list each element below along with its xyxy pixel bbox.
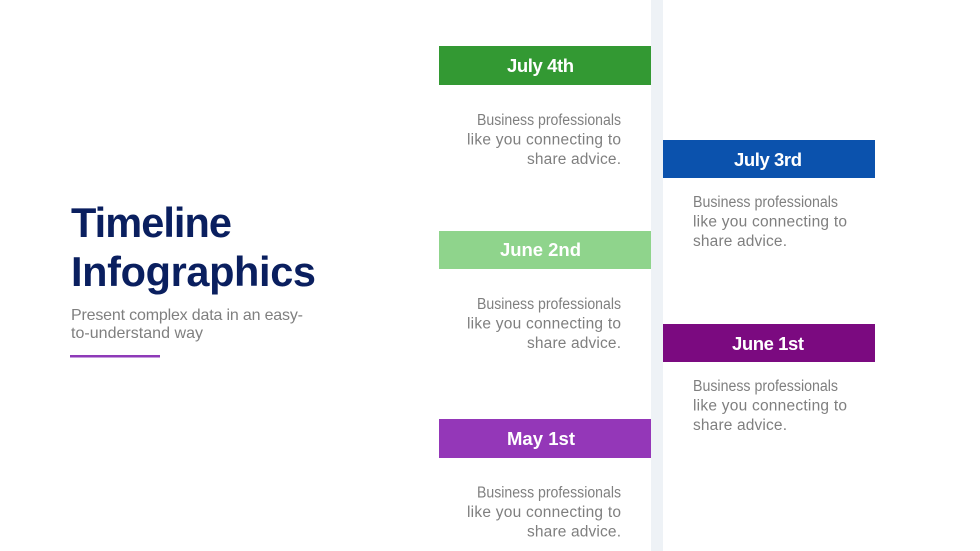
description: June 2nd: [467, 296, 621, 352]
header bar: June 1st: June 1st: [732, 333, 804, 354]
header bar: July 4th: July 4th: [507, 55, 574, 76]
subtitle: [71, 307, 303, 342]
description: May 1st: [467, 484, 621, 540]
description: July 3rd: like you connecting to: [693, 214, 847, 230]
milestone: May 1st: [439, 419, 651, 540]
description: June 1st: Business professionals: [693, 378, 838, 395]
description: July 4th: share advice.: [527, 151, 621, 168]
header bar: June 2nd: June 2nd: [500, 239, 581, 260]
description: June 1st: [693, 378, 847, 434]
subtitle: to-understand way: [71, 325, 203, 342]
header bar: July 4th: [439, 46, 651, 85]
subtitle: Present complex data in an easy-: [71, 307, 303, 324]
description: July 3rd: share advice.: [693, 233, 787, 250]
description: June 1st: share advice.: [693, 417, 787, 434]
milestone: June 2nd: [439, 231, 651, 352]
title: Timeline: [71, 199, 232, 246]
header bar: June 2nd: [439, 231, 651, 269]
description: June 2nd: Business professionals: [477, 296, 621, 313]
header bar: July 3rd: July 3rd: [734, 149, 802, 170]
description: May 1st: share advice.: [527, 524, 621, 540]
header bar: July 3rd: [663, 140, 875, 178]
description: June 2nd: like you connecting to: [467, 316, 621, 332]
title: [71, 199, 316, 295]
milestone: June 1st: [663, 324, 875, 434]
description: July 4th: Business professionals: [477, 112, 621, 129]
description: May 1st: Business professionals: [477, 484, 621, 502]
header bar: May 1st: [439, 419, 651, 458]
description: June 2nd: share advice.: [527, 335, 621, 352]
description: July 4th: like you connecting to: [467, 132, 621, 148]
center timeline band: [651, 0, 663, 551]
milestone: July 3rd: [663, 140, 875, 250]
description: May 1st: like you connecting to: [467, 504, 621, 521]
description: July 3rd: Business professionals: [693, 194, 838, 211]
title underline accent: [70, 355, 160, 358]
description: June 1st: like you connecting to: [693, 398, 847, 414]
milestone: July 4th: [439, 46, 651, 168]
description: July 3rd: [693, 194, 847, 250]
description: July 4th: [467, 112, 621, 168]
title: Infographics: [71, 248, 316, 295]
header bar: June 1st: [663, 324, 875, 362]
header bar: May 1st: May 1st: [507, 428, 575, 449]
